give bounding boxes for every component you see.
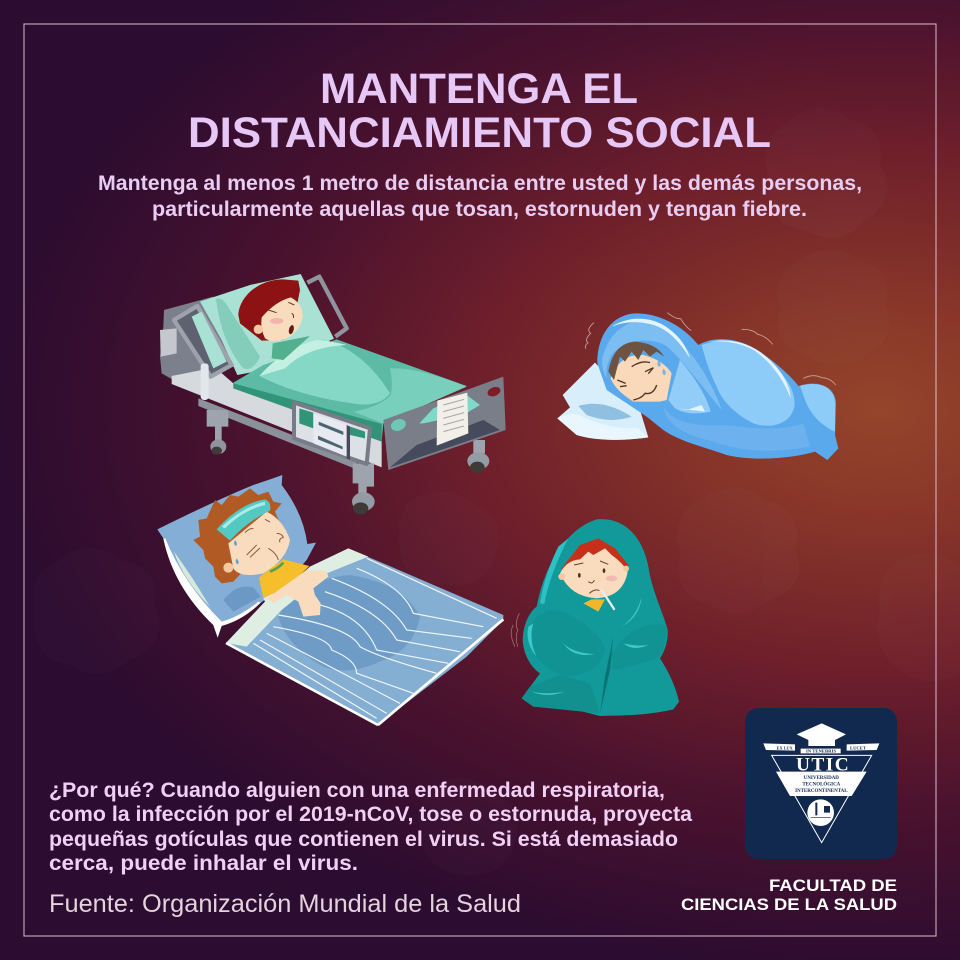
blanket bbox=[226, 548, 503, 725]
arm and hands bbox=[267, 570, 328, 617]
cold compress bbox=[217, 499, 270, 541]
headboard bbox=[160, 297, 233, 380]
icon: graduation cap bbox=[797, 723, 846, 746]
clipboard bbox=[437, 393, 468, 446]
logo badge: INTERCONTINENTAL bbox=[795, 789, 848, 794]
footboard bbox=[383, 377, 506, 470]
pillow bbox=[200, 274, 334, 375]
explanation text: cerca, puede inhalar el virus. bbox=[49, 852, 358, 875]
triangle emblem bbox=[772, 755, 872, 843]
illustration: feverish child wrapped in teal blanket bbox=[511, 519, 679, 716]
title bbox=[188, 65, 771, 157]
shirt bbox=[259, 559, 309, 598]
title: MANTENGA EL bbox=[320, 65, 638, 113]
illustration: shivering child under blue blanket bbox=[557, 313, 838, 460]
icon: lighthouse seal bbox=[807, 799, 834, 826]
faculty label: CIENCIAS DE LA SALUD bbox=[681, 895, 897, 914]
faculty label bbox=[681, 876, 897, 914]
explanation text: como la infección por el 2019-nCoV, tose o estornuda, proyecta bbox=[49, 803, 692, 826]
far side rail bbox=[307, 277, 347, 337]
side rail with controls bbox=[294, 403, 370, 464]
background virus pattern bbox=[33, 108, 960, 875]
logo badge: EX LUX bbox=[777, 746, 793, 750]
shiver lines bbox=[511, 613, 519, 647]
collar bbox=[583, 599, 605, 612]
hair bbox=[193, 488, 282, 583]
logo badge bbox=[745, 708, 897, 859]
bed legs and wheels bbox=[207, 410, 489, 514]
shiver lines bbox=[585, 313, 836, 385]
hair bbox=[562, 538, 628, 577]
face bbox=[560, 548, 628, 598]
left head rail bbox=[174, 306, 232, 377]
illustration: boy in hospital bed bbox=[160, 274, 506, 514]
subtitle text: particularmente aquellas que tosan, estornuden y tengan fiebre. bbox=[152, 198, 807, 221]
explanation text bbox=[49, 779, 692, 875]
subtitle text bbox=[98, 172, 862, 221]
title: DISTANCIAMIENTO SOCIAL bbox=[188, 109, 771, 157]
subtitle text: Mantenga al menos 1 metro de distancia entre usted y las demás personas, bbox=[98, 172, 862, 195]
boy sleeping bbox=[238, 279, 310, 360]
logo badge: UNIVERSIDAD bbox=[804, 776, 839, 781]
pillows bbox=[557, 363, 648, 440]
logo badge: UTIC bbox=[796, 755, 849, 776]
pillow bbox=[157, 475, 316, 638]
faculty label: FACULTAD DE bbox=[769, 876, 897, 895]
logo badge: IN TENEBRIS bbox=[806, 750, 836, 754]
blanket bbox=[522, 519, 679, 716]
blanket bbox=[259, 339, 390, 404]
source line: Fuente: Organización Mundial de la Salud bbox=[49, 890, 521, 918]
illustration: child in bed with cold compress bbox=[157, 475, 503, 725]
explanation text: ¿Por qué? Cuando alguien con una enfermedad respiratoria, bbox=[49, 779, 665, 802]
blanket body bbox=[597, 313, 838, 460]
motto ribbon bbox=[763, 743, 879, 753]
explanation text: pequeñas gotículas que contienen el virus. Si está demasiado bbox=[49, 828, 678, 851]
face bbox=[228, 512, 290, 575]
face bbox=[611, 355, 672, 402]
logo badge: LUCET bbox=[850, 746, 867, 750]
thermometer bbox=[602, 590, 614, 609]
bed platform bbox=[172, 367, 382, 467]
mattress bbox=[233, 339, 467, 442]
logo badge: TECNOLÓGICA bbox=[802, 781, 841, 787]
